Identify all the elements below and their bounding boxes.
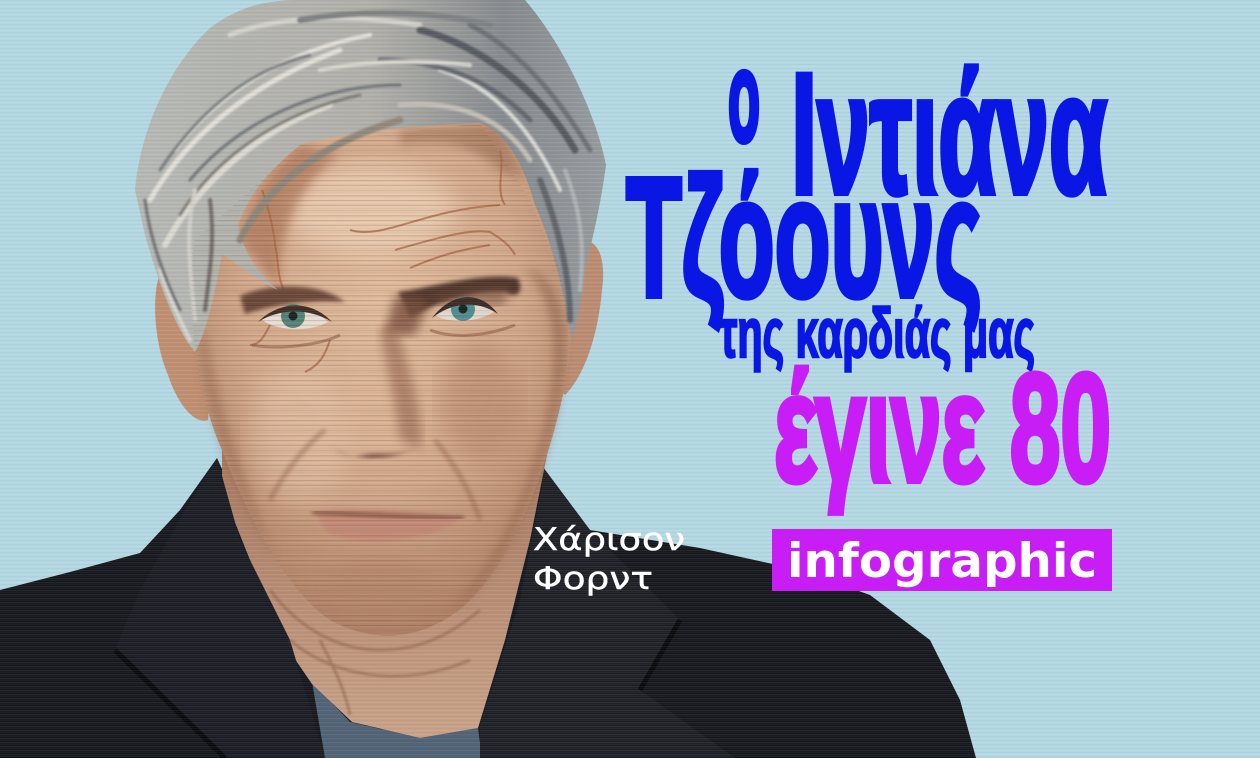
skin texture — [191, 123, 568, 636]
hair — [135, 0, 606, 352]
mouth — [312, 509, 464, 602]
right ear — [540, 240, 603, 395]
name caption: Φορντ — [533, 561, 653, 597]
eyes — [252, 297, 515, 347]
t-shirt — [312, 682, 482, 758]
nose — [270, 320, 480, 520]
name caption: Χάρισον — [533, 522, 685, 558]
forehead wrinkles — [250, 150, 515, 372]
face shading — [200, 125, 564, 610]
title — [626, 26, 1111, 514]
name caption — [533, 522, 685, 597]
subtitle: της καρδιάς μας: της καρδιάς μας — [719, 294, 1035, 372]
infographic badge: infographic — [787, 534, 1097, 589]
title: ο — [728, 26, 760, 169]
neck — [222, 440, 550, 738]
jacket — [0, 458, 976, 758]
eyebrows — [240, 277, 520, 335]
jacket lapels — [115, 458, 735, 758]
face — [191, 110, 572, 636]
left ear — [155, 262, 215, 421]
hair strands — [145, 13, 590, 340]
neck wrinkles — [270, 590, 480, 715]
portrait — [0, 0, 976, 758]
